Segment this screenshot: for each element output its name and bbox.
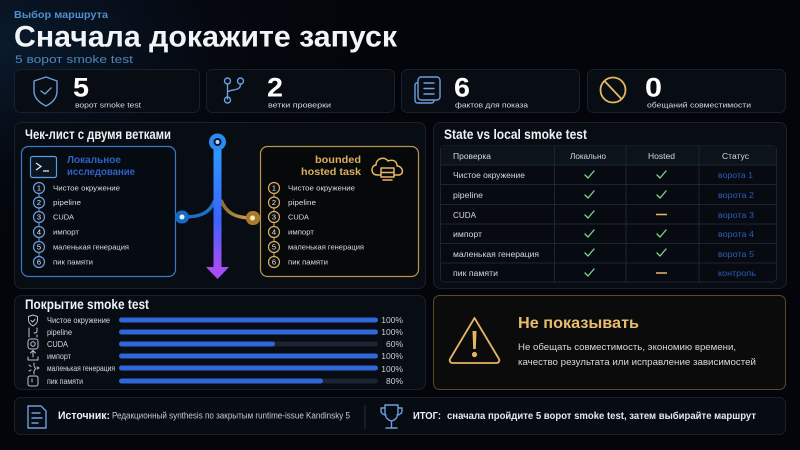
table heading: State vs local smoke test: [444, 127, 587, 142]
KPI card: 6 facts: [402, 70, 580, 112]
KPI card: 5 gates: [14, 70, 200, 112]
comparison table: pipeline: [453, 191, 484, 200]
local steps list: 5: [37, 243, 41, 252]
hosted steps list: 6: [272, 258, 276, 267]
KPI card: 2 branches: [206, 70, 394, 112]
hosted steps list: pipeline: [288, 198, 316, 207]
comparison table: CUDA: [453, 211, 477, 220]
icon: documents: [415, 77, 440, 103]
hosted card title: bounded: [315, 154, 361, 166]
coverage bar chart: 80%: [386, 376, 403, 386]
takeaway: ИТОГ:: [413, 411, 441, 422]
hosted steps list: маленькая генерация: [288, 243, 364, 252]
local steps list: импорт: [53, 228, 80, 237]
comparison table: Чистое окружение: [453, 171, 526, 180]
icon: cloud database: [372, 158, 402, 180]
comparison table: контроль: [718, 269, 756, 278]
card: bounded hosted task: [260, 146, 418, 276]
local steps list: pipeline: [53, 198, 81, 207]
footer bar: Редакционный synthesis по закрытым runtime-issue Kandinsky 5: [112, 410, 350, 420]
comparison table: ворота 2: [718, 191, 755, 200]
comparison table: импорт: [453, 230, 482, 239]
panel: coverage: [14, 296, 426, 390]
coverage icons: [28, 315, 39, 386]
hosted steps list: импорт: [288, 228, 315, 237]
comparison table: ворота 3: [718, 211, 755, 220]
hosted steps list: [268, 182, 364, 268]
hosted card title: hosted task: [301, 166, 361, 178]
comparison table: ворота 4: [718, 230, 755, 239]
coverage heading: Покрытие smoke test: [25, 297, 149, 312]
hosted steps list: 4: [272, 228, 276, 237]
coverage bar chart: [119, 315, 403, 386]
hosted card title: [301, 154, 361, 178]
eyebrow label: Выбор маршрута: [14, 9, 108, 21]
hosted steps list: 2: [272, 198, 276, 207]
icon: prohibited: [600, 78, 626, 102]
title: Сначала докажите запуск: [14, 20, 398, 54]
comparison table: пик памяти: [453, 269, 498, 278]
coverage labels: Чистое окружение: [47, 316, 111, 325]
comparison table: Локально: [570, 152, 607, 161]
icon: trophy: [381, 405, 402, 428]
local steps list: 1: [37, 184, 41, 193]
hosted steps list: 5: [272, 243, 276, 252]
warning text: качество результата или исправление зависимостей: [518, 357, 756, 367]
KPI card: 5 gates: 5: [73, 72, 89, 102]
local steps list: 3: [37, 213, 41, 222]
icon: terminal: [30, 156, 56, 178]
panel: state vs local table: [434, 122, 786, 288]
source note: Источник:: [58, 410, 110, 422]
coverage bar chart: 100%: [381, 315, 403, 325]
card: local research: [22, 146, 176, 276]
hosted steps list: CUDA: [288, 213, 309, 222]
hosted steps list: 1: [272, 184, 276, 193]
KPI card: 2 branches: ветки проверки: [268, 100, 331, 110]
coverage labels: маленькая генерация: [47, 364, 115, 373]
comparison table: ворота 5: [718, 250, 755, 259]
icon: shield: [34, 77, 57, 106]
KPI card: 0 promises: обещаний совместимости: [647, 100, 751, 110]
local steps list: пик памяти: [53, 258, 93, 267]
local steps list: [34, 182, 129, 268]
panel: checklist with two branches: [14, 122, 426, 288]
coverage labels: [47, 316, 115, 386]
comparison table: маленькая генерация: [453, 250, 539, 259]
comparison table: Hosted: [648, 152, 675, 161]
coverage labels: pipeline: [47, 328, 72, 337]
KPI card: 0 promises: 0: [645, 72, 662, 102]
local steps list: Чистое окружение: [53, 184, 120, 193]
warning text: Не обещать совместимость, экономию времени,: [518, 342, 736, 352]
icon: git branch: [228, 84, 240, 99]
hosted steps list: Чистое окружение: [288, 184, 355, 193]
comparison table: [440, 146, 776, 282]
local steps list: 6: [37, 258, 41, 267]
icon: document: [28, 406, 46, 428]
coverage labels: CUDA: [47, 340, 69, 349]
footer bar: сначала пройдите 5 ворот smoke test, затем выбирайте маршрут: [447, 410, 756, 422]
coverage bar chart: 60%: [386, 339, 403, 349]
panel: do not show warning: [434, 296, 786, 390]
branch diagram: [175, 134, 260, 279]
KPI card: 6 facts: 6: [454, 72, 470, 102]
local card title: [67, 154, 135, 178]
local steps list: 2: [37, 198, 41, 207]
hosted steps list: пик памяти: [288, 258, 328, 267]
coverage bar chart: 100%: [381, 327, 403, 337]
coverage labels: импорт: [47, 352, 71, 361]
KPI card: 2 branches: 2: [267, 72, 283, 102]
coverage bar chart: 100%: [381, 364, 403, 374]
checklist heading: Чек-лист с двумя ветками: [25, 127, 171, 142]
icon: warning triangle: [450, 318, 499, 363]
local card title: исследование: [67, 166, 135, 178]
comparison table: Статус: [722, 152, 749, 161]
KPI card: 6 facts: фактов для показа: [455, 100, 529, 110]
footer bar: [14, 398, 786, 434]
local steps list: 4: [37, 228, 41, 237]
subtitle: 5 ворот smoke test: [15, 54, 133, 66]
coverage bar chart: 100%: [381, 351, 403, 361]
warning text: [518, 342, 756, 367]
KPI card: 0 promises: [588, 70, 786, 112]
warning title: Не показывать: [518, 315, 639, 332]
hosted steps list: 3: [272, 213, 276, 222]
comparison table: ворота 1: [718, 171, 754, 180]
local steps list: маленькая генерация: [53, 243, 129, 252]
comparison table: Проверка: [453, 152, 492, 161]
KPI card: 5 gates: ворот smoke test: [75, 100, 142, 110]
coverage labels: пик памяти: [47, 377, 83, 386]
local card title: Локальное: [67, 154, 121, 166]
local steps list: CUDA: [53, 213, 74, 222]
